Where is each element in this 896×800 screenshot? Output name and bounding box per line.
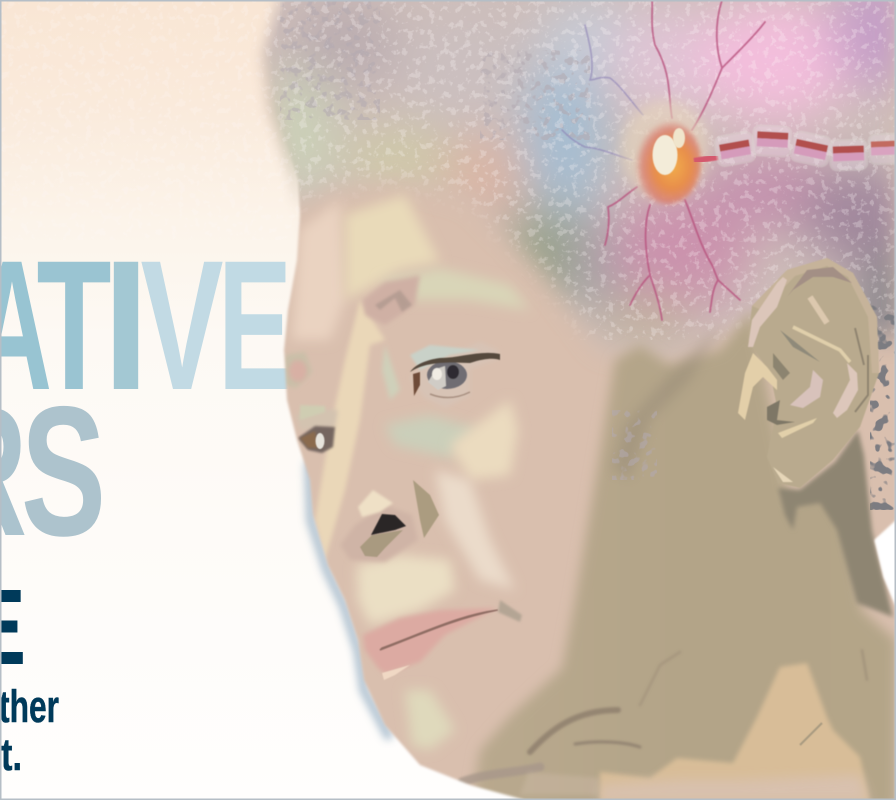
left eyebrow area xyxy=(286,352,311,387)
right eye xyxy=(410,344,501,399)
title fragment: ATIVE: V xyxy=(140,223,224,429)
portrait of a woman with neuron overlay xyxy=(240,0,896,800)
axon stem xyxy=(694,157,718,161)
myelin sheath segments xyxy=(714,125,896,171)
body text fragment: ther: ther xyxy=(0,681,59,732)
dark blotches behind the ear xyxy=(870,305,896,510)
dithered temple shadow xyxy=(616,336,714,473)
nose xyxy=(340,480,439,562)
title fragment: ATIVE: T xyxy=(36,223,112,429)
hair: painted colour wash xyxy=(264,2,894,355)
title fragment: RS: S xyxy=(21,369,106,575)
faint paper speckle, top left xyxy=(0,0,300,240)
nucleus xyxy=(652,135,678,175)
white notch at right edge xyxy=(875,522,896,606)
title fragment: ATIVE xyxy=(0,223,292,429)
ear xyxy=(738,258,879,488)
neuron xyxy=(562,0,896,320)
facial highlights xyxy=(292,195,530,750)
shadow below the ear xyxy=(778,430,893,617)
dendrites xyxy=(605,0,765,320)
chest highlight xyxy=(600,663,870,800)
title fragment: ATIVE: E xyxy=(218,223,292,429)
skin base xyxy=(250,0,896,800)
nucleolus xyxy=(673,128,685,148)
right eyebrow xyxy=(363,275,420,325)
jaw highlight under wrinkles xyxy=(523,774,597,794)
neck and jaw tan area xyxy=(470,310,896,800)
body text fragment: t.: t. xyxy=(1,729,22,780)
temple speckle xyxy=(612,410,657,480)
soma glow xyxy=(621,100,709,200)
hair: dark mottling xyxy=(280,0,590,140)
title fragment: ATIVE: I xyxy=(102,223,150,429)
mouth xyxy=(363,600,522,680)
blue shadow along the face edge xyxy=(309,465,388,735)
soma xyxy=(633,120,701,204)
neck wrinkles xyxy=(462,650,867,782)
left eye xyxy=(296,405,338,453)
hair: pale lace texture xyxy=(262,0,896,340)
